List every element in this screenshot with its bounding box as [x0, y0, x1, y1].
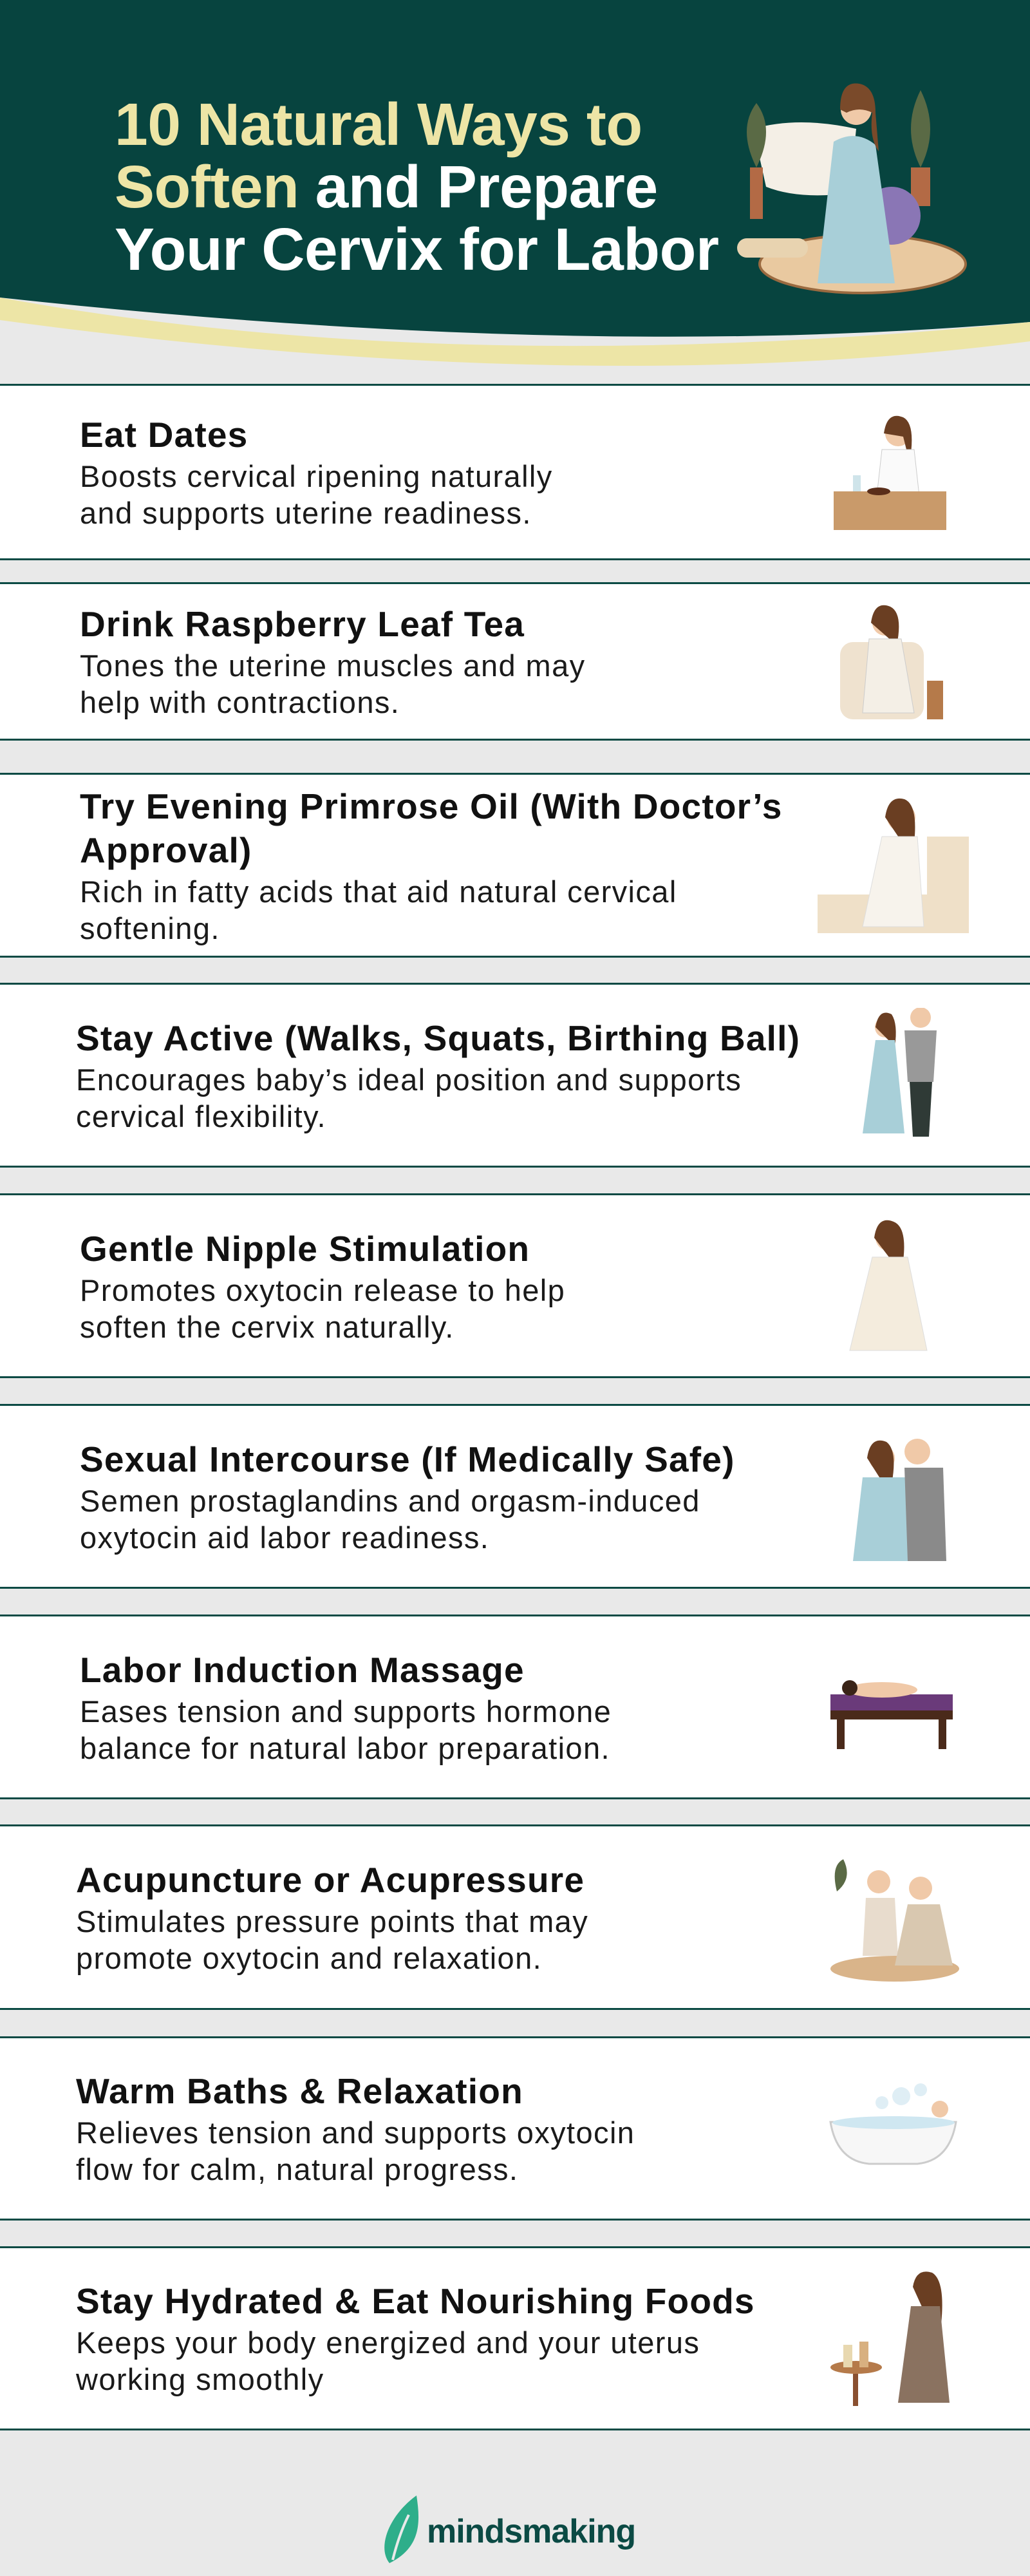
card 10: working smoothly [76, 2362, 324, 2396]
card 9 [0, 2036, 1030, 2221]
card 3: Try Evening Primrose Oil (With Doctor’s [80, 786, 783, 826]
icon: woman with tea in armchair [840, 605, 943, 719]
header background [0, 0, 1030, 366]
icon: couple embracing [853, 1439, 946, 1561]
card 4: Stay Active (Walks, Squats, Birthing Ball) [76, 1018, 800, 1057]
card 7: balance for natural labor preparation. [80, 1731, 610, 1765]
card 7 [0, 1615, 1030, 1799]
card 1: Boosts cervical ripening naturally [80, 459, 553, 493]
card 9: flow for calm, natural progress. [76, 2152, 518, 2186]
card 2: Drink Raspberry Leaf Tea [80, 604, 525, 644]
icon: leaf [384, 2496, 418, 2563]
title: Soften and Prepare [115, 153, 658, 220]
card 2: Tones the uterine muscles and may [80, 649, 586, 683]
icon: acupressure session [830, 1859, 959, 1982]
card 5: Promotes oxytocin release to help [80, 1273, 565, 1307]
icon: bathtub [829, 2083, 957, 2165]
card 2: help with contractions. [80, 685, 400, 719]
card 8: Stimulates pressure points that may [76, 1904, 588, 1938]
card 9: Relieves tension and supports oxytocin [76, 2116, 635, 2150]
card 5: Gentle Nipple Stimulation [80, 1229, 530, 1269]
hero illustration: woman on birthing ball [737, 84, 967, 294]
card 5 [0, 1193, 1030, 1378]
icon: woman drinking water [830, 2271, 950, 2406]
card 4 [0, 983, 1030, 1168]
icon: massage table [830, 1680, 953, 1749]
card 10: Keeps your body energized and your uterus [76, 2325, 700, 2360]
card 10 [0, 2246, 1030, 2430]
icon: seated woman [850, 1220, 927, 1351]
card 7: Eases tension and supports hormone [80, 1694, 612, 1728]
card 8 [0, 1824, 1030, 2010]
icon: woman eating dates [834, 416, 946, 530]
card 6: Semen prostaglandins and orgasm-induced [80, 1484, 700, 1517]
icon: woman on sofa [818, 799, 969, 933]
logo: mindsmaking: mindsmaking [427, 2513, 635, 2550]
title: Your Cervix for Labor [115, 216, 719, 283]
card 6: oxytocin aid labor readiness. [80, 1520, 489, 1555]
title [115, 91, 719, 283]
card 3: Rich in fatty acids that aid natural cervical [80, 875, 677, 908]
card 1: and supports uterine readiness. [80, 496, 532, 530]
card 1: Eat Dates [80, 415, 248, 455]
card 1 [0, 384, 1030, 560]
card 4: cervical flexibility. [76, 1099, 326, 1133]
title: 10 Natural Ways to [115, 91, 642, 158]
card 4: Encourages baby’s ideal position and supports [76, 1063, 742, 1096]
logo: mindsmaking [384, 2496, 635, 2563]
card 6: Sexual Intercourse (If Medically Safe) [80, 1439, 735, 1479]
card 7: Labor Induction Massage [80, 1650, 525, 1690]
card 8: Acupuncture or Acupressure [76, 1860, 585, 1900]
card 10: Stay Hydrated & Eat Nourishing Foods [76, 2281, 755, 2321]
card 6 [0, 1404, 1030, 1589]
icon: couple walking [863, 1008, 937, 1137]
card 2 [0, 582, 1030, 741]
card 9: Warm Baths & Relaxation [76, 2071, 523, 2111]
card 3: Approval) [80, 829, 252, 869]
card 5: soften the cervix naturally. [80, 1310, 454, 1343]
card 3: softening. [80, 911, 220, 945]
card 3 [0, 773, 1030, 958]
card 8: promote oxytocin and relaxation. [76, 1941, 542, 1975]
